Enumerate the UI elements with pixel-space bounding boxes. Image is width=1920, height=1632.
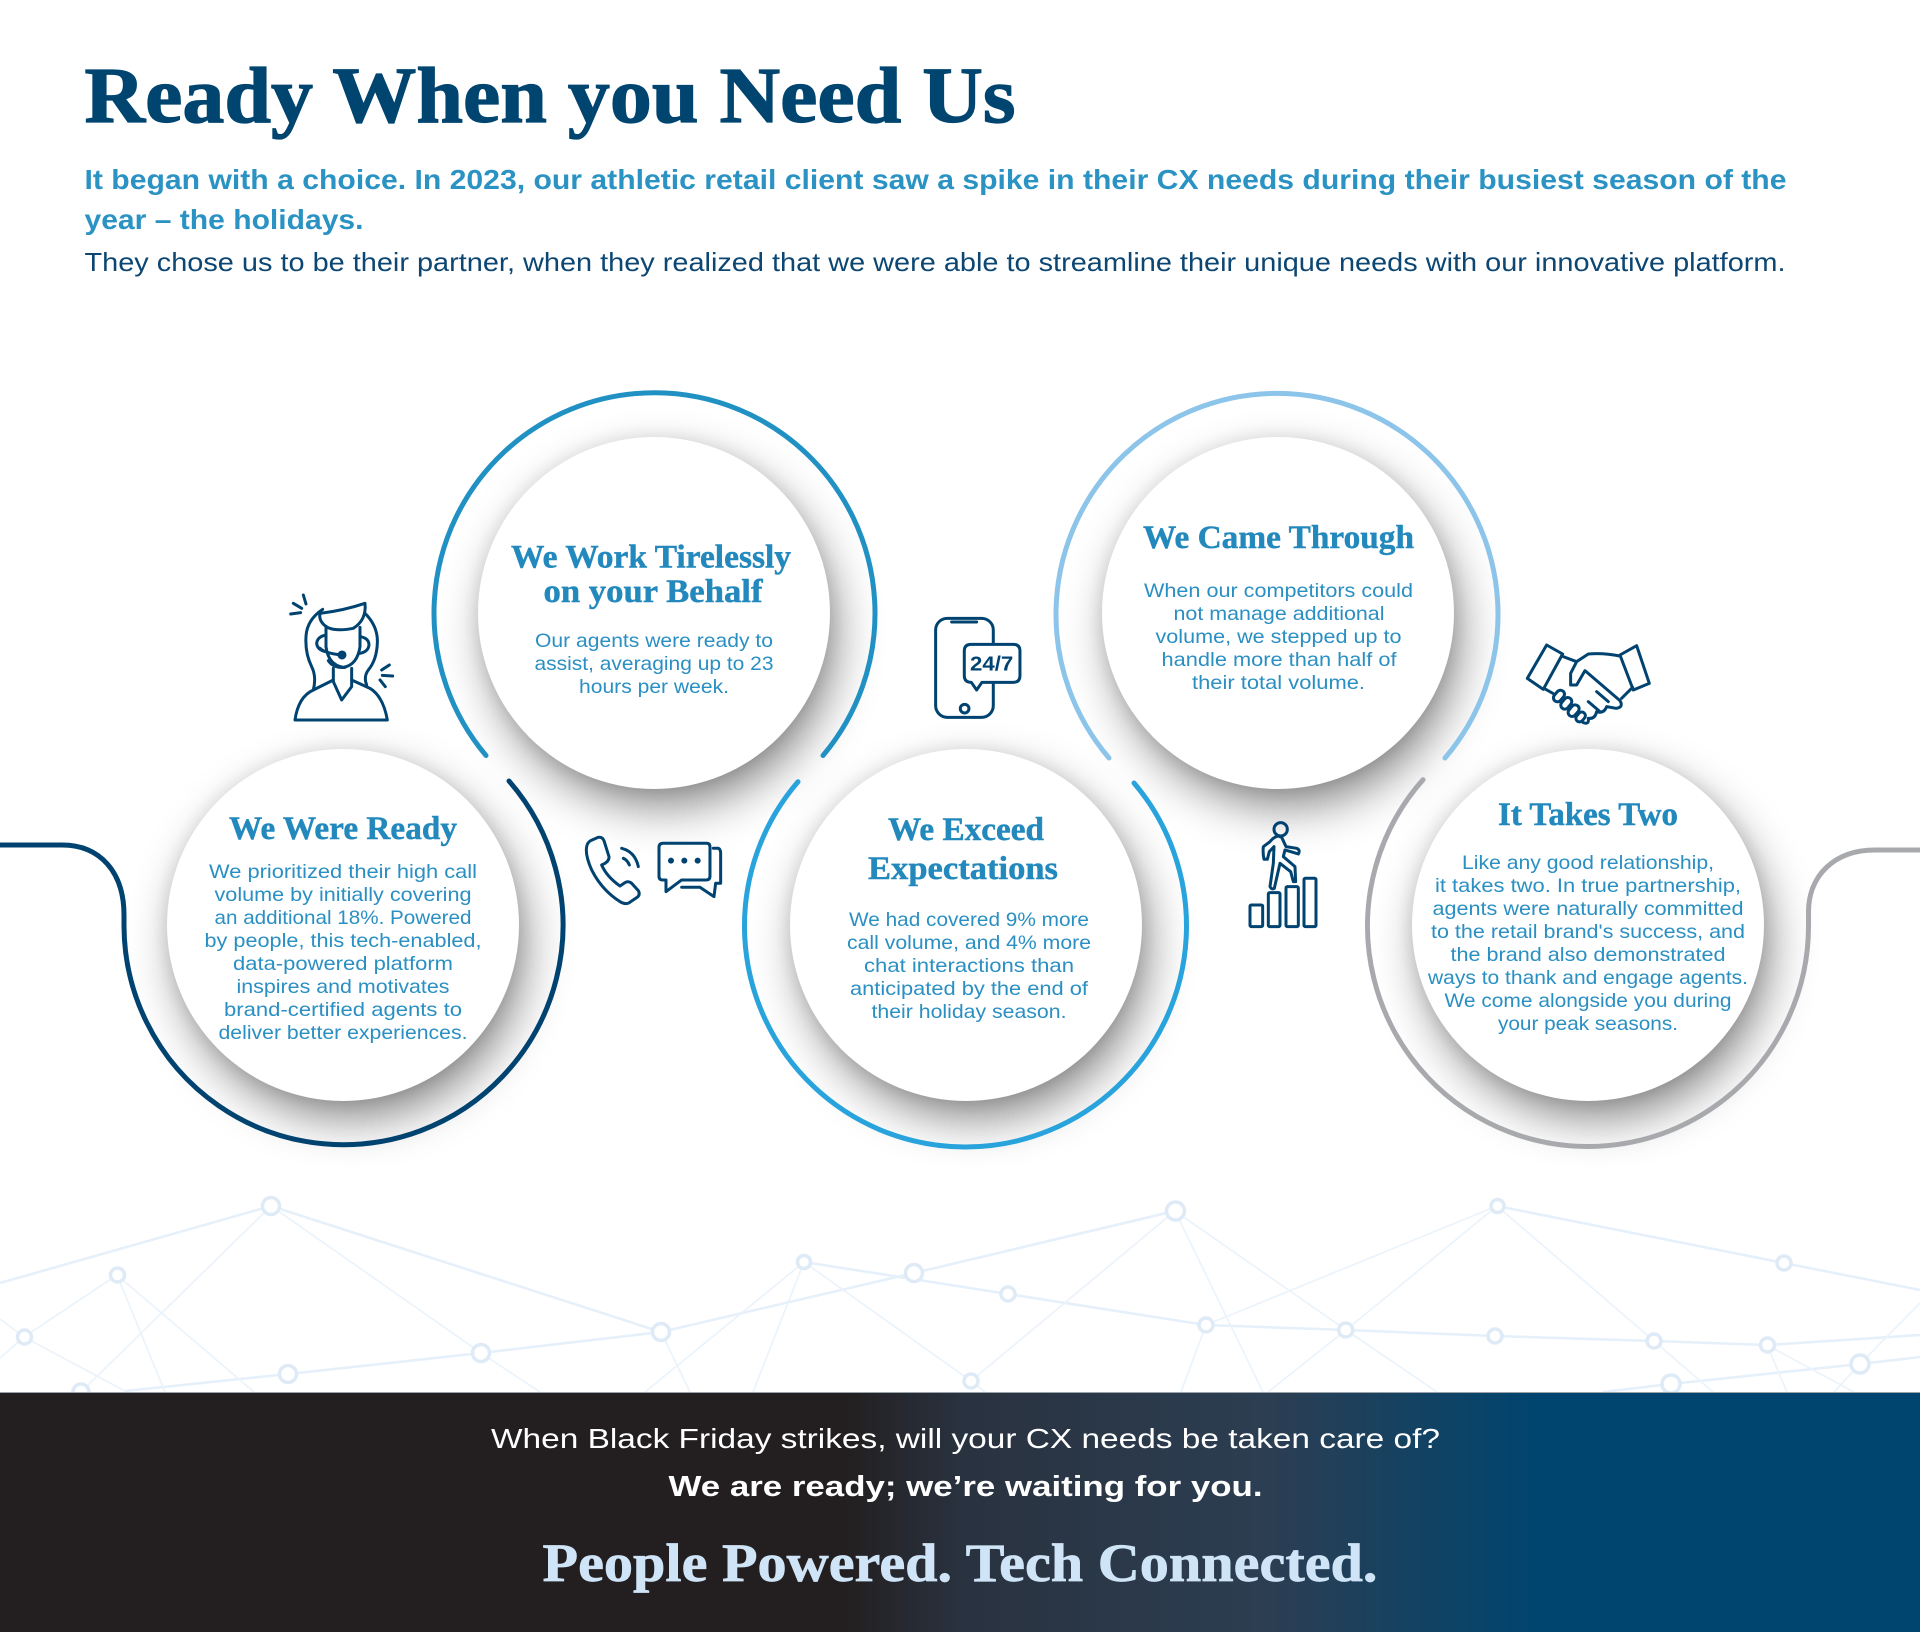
title: Ready When you Need Us	[84, 53, 1015, 140]
panel: We Came Through	[1102, 437, 1454, 789]
body: It Takes Two: ways to thank and engage agents.	[1427, 967, 1748, 989]
icon: person climbing bars	[1250, 823, 1316, 927]
footer slogan: People Powered. Tech Connected.	[542, 1533, 1378, 1593]
icon: handshake	[1527, 645, 1649, 723]
network background pattern	[0, 1198, 1920, 1400]
body: We Came Through: their total volume.	[1192, 672, 1365, 694]
intro highlight: year – the holidays.	[84, 204, 364, 235]
ring 4 light blue	[1056, 393, 1498, 758]
body: It Takes Two: agents were naturally committed	[1432, 898, 1744, 920]
heading: We Were Ready: We Were Ready	[229, 811, 457, 847]
body: We Were Ready	[204, 861, 482, 1044]
body: We Came Through: handle more than half of	[1162, 649, 1397, 671]
body: We Were Ready: volume by initially covering	[214, 884, 472, 906]
heading: We Came Through: We Came Through	[1143, 520, 1414, 556]
body: We Were Ready: We prioritized their high call	[209, 861, 477, 883]
intro text block	[84, 164, 1786, 277]
heading: We Exceed Expectations	[868, 812, 1058, 887]
body: We Were Ready: an additional 18%. Powered	[214, 907, 472, 929]
footer question: When Black Friday strikes, will your CX needs be taken care of?	[491, 1423, 1440, 1454]
heading: We Work Tirelessly: We Work Tirelessly	[511, 540, 792, 576]
body: We Work Tirelessly: Our agents were ready to	[535, 630, 773, 652]
footer answer: We are ready; we’re waiting for you.	[668, 1471, 1262, 1503]
body: It Takes Two: to the retail brand's success, and	[1431, 921, 1745, 943]
body: We Work Tirelessly	[534, 630, 774, 698]
panel: We Were Ready	[167, 749, 519, 1101]
body: We Exceed Expectations: We had covered 9% more	[849, 909, 1089, 931]
body: It Takes Two: it takes two. In true partnership,	[1435, 875, 1741, 897]
body: It Takes Two: We come alongside you during	[1444, 990, 1732, 1012]
body: We Exceed Expectations: chat interactions than	[864, 955, 1074, 977]
intro highlight: It began with a choice. In 2023, our athletic retail client saw a spike in their CX needs during their busiest season of the	[84, 164, 1786, 195]
body: We Came Through	[1144, 580, 1413, 694]
icon: telephone	[586, 837, 639, 904]
body: We Work Tirelessly: assist, averaging up to 23	[534, 653, 774, 675]
panel: We Exceed Expectations	[790, 749, 1142, 1101]
panel: We Work Tirelessly	[478, 437, 830, 789]
body: We Were Ready: inspires and motivates	[236, 976, 450, 998]
ring 1 navy with left connector	[0, 781, 563, 1145]
intro highlight	[84, 164, 1786, 235]
body: We Exceed Expectations	[847, 909, 1091, 1023]
heading: It Takes Two: It Takes Two	[1498, 797, 1678, 833]
body: We Exceed Expectations: their holiday season.	[872, 1001, 1066, 1023]
body: We Exceed Expectations: anticipated by the end of	[850, 978, 1089, 1000]
intro body line: They chose us to be their partner, when they realized that we were able to streamline their unique needs with our innovative platform.	[84, 247, 1786, 277]
footer band	[0, 1392, 1920, 1632]
body: We Were Ready: brand-certified agents to	[224, 999, 462, 1021]
body: We Were Ready: deliver better experiences.	[218, 1022, 468, 1044]
panel: It Takes Two	[1412, 749, 1764, 1101]
icon: call centre agent	[291, 595, 393, 720]
heading: We Work Tirelessly: on your Behalf	[544, 574, 764, 610]
body: We Were Ready: data-powered platform	[233, 953, 453, 975]
ring 3 bright blue	[744, 782, 1186, 1147]
heading: We Exceed Expectations: Expectations	[868, 851, 1058, 887]
body: We Came Through: not manage additional	[1174, 603, 1384, 625]
icon: chat bubbles	[659, 843, 721, 897]
body: We Work Tirelessly: hours per week.	[579, 676, 729, 698]
body: We Were Ready: by people, this tech-enabled,	[204, 930, 482, 952]
body: It Takes Two	[1427, 852, 1748, 1035]
ring 2 blue	[434, 393, 875, 756]
body: It Takes Two: your peak seasons.	[1498, 1013, 1678, 1035]
body: We Came Through: When our competitors could	[1144, 580, 1413, 602]
body: It Takes Two: Like any good relationship,	[1462, 852, 1714, 874]
heading: We Exceed Expectations: We Exceed	[888, 812, 1044, 848]
body: We Came Through: volume, we stepped up to	[1156, 626, 1402, 648]
icon: phone with 24/7 bubble: 24/7	[970, 653, 1013, 676]
icon: phone with 24/7 bubble	[936, 618, 1020, 717]
heading: We Work Tirelessly	[511, 540, 792, 610]
body: It Takes Two: the brand also demonstrated	[1450, 944, 1726, 966]
ring 5 grey with right connector	[1367, 780, 1920, 1146]
body: We Exceed Expectations: call volume, and 4% more	[847, 932, 1091, 954]
